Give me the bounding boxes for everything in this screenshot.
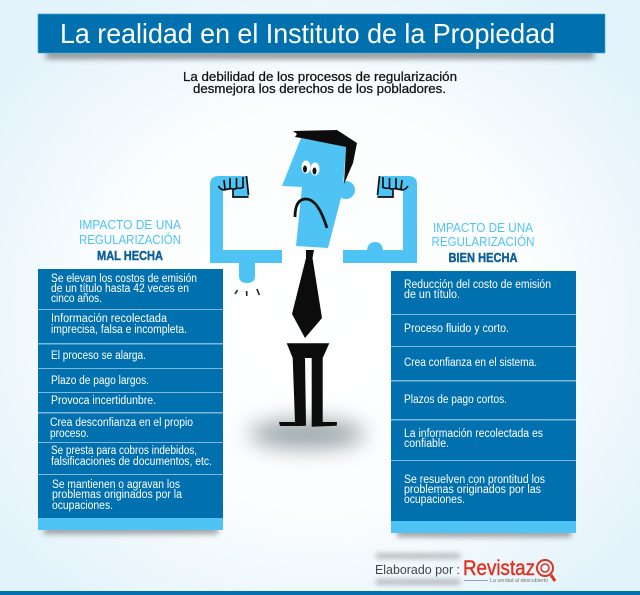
bottom bar	[0, 591, 640, 595]
right list text: de un título.	[404, 289, 460, 301]
right list text: problemas originados por las	[404, 484, 541, 496]
tie	[292, 250, 322, 338]
left list text: Crea desconfianza en el propio	[50, 417, 193, 429]
hair	[293, 130, 357, 184]
credit: elaborado por revistazo	[375, 554, 555, 584]
title banner: La realidad en el Instituto de la Propiedad	[60, 18, 555, 49]
left list text: falsificaciones de documentos, etc.	[51, 456, 212, 468]
credit: elaborado por revistazo: Revistaz	[463, 557, 535, 580]
heading: bien hecha: BIEN HECHA	[448, 250, 518, 265]
subtitle: desmejora los derechos de los pobladores.	[193, 82, 446, 96]
figure: frustrated man flexing arms	[210, 130, 417, 448]
left list text: Provoca incertidunbre.	[51, 395, 156, 407]
panel: impacto bien hecha	[391, 271, 576, 537]
right list text: ocupaciones.	[404, 494, 465, 506]
left list text: ocupaciones.	[52, 500, 113, 512]
right arm	[343, 176, 417, 263]
left arm	[210, 176, 282, 296]
right list text: confiable.	[404, 438, 449, 450]
left list text: El proceso se alarga.	[51, 350, 146, 362]
left list text: Se presta para cobros indebidos,	[51, 445, 197, 457]
left list text: Se mantienen o agravan los	[52, 479, 180, 491]
left list text: Plazo de pago largos.	[51, 375, 149, 387]
left list text: de un título hasta 42 veces en	[51, 283, 189, 295]
head	[282, 138, 346, 248]
subtitle	[183, 70, 457, 96]
credit: elaborado por revistazo: La verdad al descubierto	[490, 578, 548, 584]
right list text: Plazos de pago cortos.	[404, 394, 507, 406]
heading: mal hecha: MAL HECHA	[97, 248, 164, 263]
right list text	[404, 279, 551, 506]
heading: mal hecha	[79, 218, 182, 263]
heading: bien hecha	[432, 221, 534, 265]
left list text: proceso.	[50, 428, 89, 440]
icon: magnifier	[537, 560, 555, 581]
eyes	[302, 160, 320, 176]
frown	[295, 199, 327, 228]
left list text: Se elevan los costos de emisión	[51, 273, 197, 285]
right list text: Crea confianza en el sistema.	[404, 357, 537, 369]
left list text: problemas originados por la	[52, 489, 183, 501]
trousers and shoes	[279, 343, 337, 427]
ear	[337, 181, 355, 199]
title banner	[38, 14, 605, 59]
right list text: Reducción del costo de emisión	[404, 279, 551, 291]
right list text: Se resuelven con prontitud los	[404, 474, 545, 486]
right list text: La información recolectada es	[404, 428, 543, 440]
panel: impacto mal hecha	[38, 269, 223, 534]
subtitle: La debilidad de los procesos de regularización	[183, 70, 457, 84]
credit: elaborado por revistazo: Elaborado por :	[375, 562, 460, 577]
left list text: cinco años.	[51, 293, 102, 305]
left list text	[50, 273, 212, 512]
heading: mal hecha: IMPACTO DE UNA	[79, 218, 182, 232]
left list text: imprecisa, falsa e incompleta.	[51, 324, 187, 336]
heading: mal hecha: REGULARIZACIÓN	[79, 232, 181, 247]
heading: bien hecha: IMPACTO DE UNA	[433, 221, 534, 235]
floor shadow	[249, 420, 365, 448]
heading: bien hecha: REGULARIZACIÓN	[432, 234, 534, 249]
right list text: Proceso fluido y corto.	[404, 323, 509, 335]
left list text: Información recolectada	[51, 313, 168, 325]
